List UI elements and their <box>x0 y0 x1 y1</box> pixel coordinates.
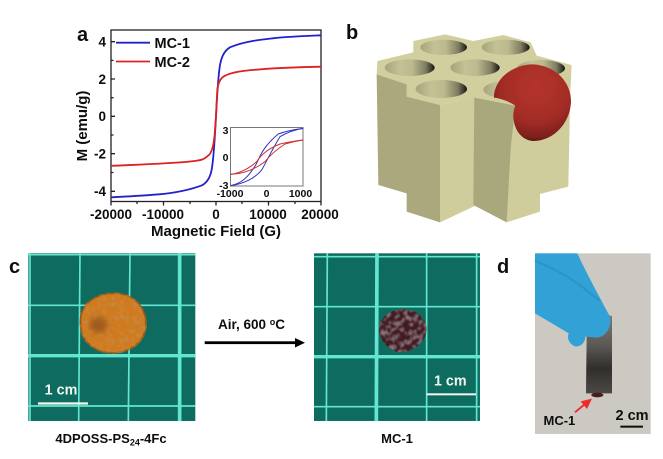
photo: MC-1 sample on cutting mat <box>314 253 480 421</box>
panel label a: a <box>77 24 89 46</box>
pores <box>385 40 565 98</box>
2 cm label: 2 cm <box>616 408 649 424</box>
top face <box>377 34 572 106</box>
red arrow <box>575 399 592 412</box>
scale bar 1 cm <box>38 382 88 405</box>
inset hysteresis chart: -3 <box>219 180 229 192</box>
panel label c: c <box>9 256 20 278</box>
legend <box>116 36 190 71</box>
dark inner wall <box>473 98 515 222</box>
inset hysteresis chart: -1000 <box>217 188 244 200</box>
x axis title: Magnetic Field (G) <box>151 223 281 240</box>
panel label d: d <box>497 256 509 278</box>
x axis numbers: -10000 <box>142 207 184 222</box>
arrow label: C <box>275 317 285 332</box>
inset hysteresis chart: 1000 <box>289 188 312 200</box>
y axis numbers: -4 <box>94 184 106 199</box>
inset hysteresis chart: 3 <box>223 125 229 137</box>
y axis title: M (emu/g) <box>74 91 91 161</box>
hexagonal block <box>377 34 572 222</box>
panel label b: b <box>346 22 358 44</box>
reaction arrow <box>205 338 305 348</box>
panel d: magnet attraction photo <box>497 253 651 434</box>
panel a: magnetization chart <box>74 24 339 240</box>
scale bar 1 cm <box>427 373 476 395</box>
orange disc <box>80 293 146 353</box>
MC-1 label: MC-1 <box>544 413 575 428</box>
curve MC-1 <box>111 35 321 197</box>
x axis numbers <box>90 207 339 222</box>
legend: MC-1 <box>154 36 190 52</box>
scale bar 2 cm <box>620 426 643 428</box>
inset hysteresis chart <box>217 125 312 200</box>
photo: 4DPOSS-PS24-4Fc sample on cutting mat <box>28 253 195 421</box>
scale bar 1 cm: 1 cm <box>434 373 467 389</box>
blue glove <box>535 253 610 346</box>
inset hysteresis chart: 0 <box>264 188 270 200</box>
caption left sample: 24 <box>130 438 140 448</box>
legend: MC-2 <box>154 55 190 71</box>
caption left sample: -4Fc <box>140 431 167 446</box>
metal magnet bar <box>586 315 612 393</box>
light right wall <box>507 75 571 222</box>
photo background <box>535 253 651 434</box>
panel c: sample photos with arrow <box>9 253 480 448</box>
y axis numbers: -2 <box>94 146 106 162</box>
y axis numbers: 2 <box>98 72 106 87</box>
y axis numbers: 4 <box>98 34 106 50</box>
caption left sample: 4DPOSS-PS <box>55 431 130 446</box>
x axis numbers: 20000 <box>301 207 339 222</box>
inset hysteresis chart: 0 <box>223 152 229 164</box>
curve MC-2 <box>111 67 321 166</box>
MC-1 sample under magnet <box>591 393 603 397</box>
x axis numbers: -20000 <box>90 207 132 222</box>
light middle wall <box>440 98 475 222</box>
y axis numbers: 0 <box>98 109 106 124</box>
dark left wall <box>377 74 440 222</box>
arrow label: o <box>270 317 276 327</box>
dark disc <box>379 309 427 352</box>
panel b: hexagonal pore 3D model <box>346 22 572 222</box>
x axis numbers: 10000 <box>249 207 287 222</box>
x axis numbers: 0 <box>212 207 220 222</box>
chart frame and ticks <box>111 30 321 206</box>
caption right sample: MC-1 <box>381 431 413 446</box>
scale bar 1 cm: 1 cm <box>45 382 77 398</box>
arrow label: Air, 600 <box>218 317 266 332</box>
red sphere <box>494 64 571 141</box>
y axis numbers <box>94 34 106 199</box>
